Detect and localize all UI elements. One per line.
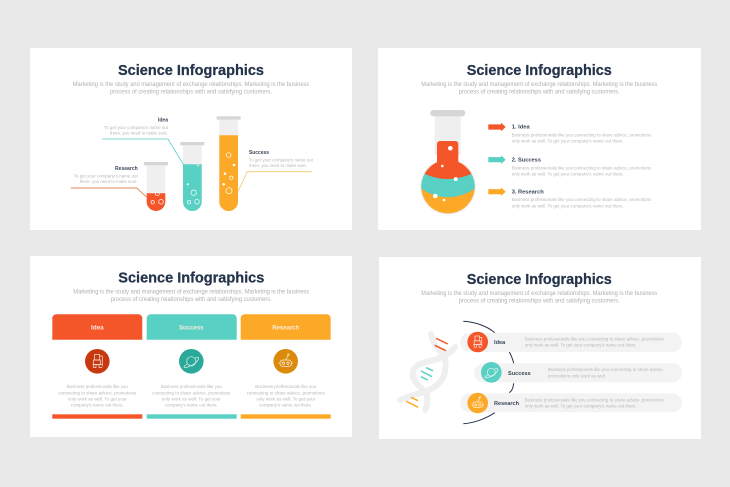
label: idea <box>104 117 169 135</box>
row: idea: Idea <box>494 340 506 346</box>
item: research: 3. Research <box>512 189 544 195</box>
subtitle: process of creating relationships with and satisfying customers. <box>110 88 272 96</box>
icon: planet <box>179 349 204 374</box>
title: Science Infographics <box>118 271 264 287</box>
card: idea: connecting to share advice, promotions <box>58 390 137 395</box>
item: success: Business professionals like you connecting to share advice, promotions <box>512 165 652 170</box>
card: research: only work as well. To get your <box>256 396 316 401</box>
item: success: only work as well. To get your company's name out there. <box>512 172 624 177</box>
panel: three cards <box>30 256 352 437</box>
card: research: company's name out there. <box>259 403 312 408</box>
card: idea: company's name out there. <box>71 403 124 408</box>
subtitle: Marketing is the study and management of exchange relationships. Marketing is the business <box>421 290 657 297</box>
row: research: only work as well. To get your company's name out there. <box>525 404 637 409</box>
arc segments <box>463 321 514 424</box>
card: success <box>147 314 237 419</box>
card: idea: only work as well. To get your <box>68 396 127 401</box>
card: research <box>241 314 331 419</box>
title: Science Infographics <box>467 272 612 288</box>
label: research: To get your company's name out <box>74 174 138 179</box>
panel: dna <box>379 257 701 439</box>
row: success: promotions only work as well. <box>548 373 606 378</box>
idea tube <box>180 142 204 211</box>
subtitle: Marketing is the study and management of exchange relationships. Marketing is the business <box>73 81 309 88</box>
item: success: 2. Success <box>512 158 541 164</box>
card: research: connecting to share advice, promotions <box>247 390 325 395</box>
icon: robot head <box>467 393 488 413</box>
title: Science Infographics <box>118 63 264 79</box>
label: success: there, you need to make sure. <box>249 163 307 168</box>
row: success <box>474 362 682 383</box>
card: idea: Idea <box>91 325 104 332</box>
label: success: To get your company's name out <box>249 157 314 162</box>
row: idea: only work as well. To get your company's name out there. <box>525 343 637 348</box>
card: idea: Business professionals like you <box>67 384 128 389</box>
panel: flask <box>378 48 701 230</box>
leader line: success <box>237 172 312 193</box>
arrow: success <box>488 155 506 164</box>
card: success: Business professionals like you <box>161 384 222 389</box>
arrow: research <box>488 187 506 196</box>
label: idea: To get your company's name out <box>104 125 169 130</box>
panel: test tubes <box>30 48 352 230</box>
row: idea <box>460 332 682 352</box>
label: success: Success <box>249 150 269 156</box>
leader line: idea <box>102 139 183 164</box>
illustration: dna helix <box>400 334 455 410</box>
row: research: Business professionals like you connecting to share advice, promotions <box>525 398 664 403</box>
flask illustration <box>420 110 476 216</box>
item: research <box>512 189 652 208</box>
success tube <box>217 116 241 211</box>
item: idea: Business professionals like you connecting to share advice, promotions <box>512 132 652 137</box>
item: research: only work as well. To get your company's name out there. <box>512 203 624 208</box>
icon: robot <box>85 349 110 374</box>
row: research <box>460 393 682 413</box>
subtitle <box>73 81 309 96</box>
label: success <box>249 150 314 168</box>
label: research: Research <box>115 166 138 172</box>
row: idea: Business professionals like you connecting to share advice, promotions <box>525 337 664 342</box>
subtitle: process of creating relationships with and satisfying customers. <box>459 88 620 96</box>
row: success: Business professionals like you connecting to share advice, <box>548 367 664 372</box>
subtitle: Marketing is the study and management of exchange relationships. Marketing is the business <box>73 289 309 296</box>
card: success: only work as well. To get your <box>162 396 221 401</box>
icon: planet <box>481 362 502 383</box>
label: research <box>74 166 138 184</box>
card: success: company's name out there. <box>165 403 218 408</box>
subtitle <box>421 81 657 96</box>
icon: robot head <box>273 349 298 374</box>
card: research: Business professionals like you <box>255 384 317 389</box>
card: success: connecting to share advice, promotions <box>152 390 231 395</box>
subtitle: Marketing is the study and management of exchange relationships. Marketing is the business <box>421 81 657 88</box>
label: idea: Idea <box>158 117 169 123</box>
subtitle <box>421 290 657 305</box>
label: research: there, you need to make sure. <box>80 179 138 184</box>
icon: robot <box>467 332 488 352</box>
arrow: idea <box>488 123 506 131</box>
card: idea <box>52 314 142 419</box>
card: research: Research <box>272 325 299 332</box>
subtitle <box>73 289 309 303</box>
card: success: Success <box>179 325 204 332</box>
research tube <box>144 162 168 211</box>
leader line: research <box>71 188 147 197</box>
item: idea <box>512 125 652 144</box>
title: Science Infographics <box>467 63 612 79</box>
item: idea: only work as well. To get your company's name out there. <box>512 139 624 144</box>
subtitle: process of creating relationships with and satisfying customers. <box>459 298 620 305</box>
row: research: Research <box>494 401 519 407</box>
subtitle: process of creating relationships with and satisfying customers. <box>111 296 272 303</box>
item: idea: 1. Idea <box>512 125 530 131</box>
row: success: Success <box>508 371 531 377</box>
item: success <box>512 158 652 177</box>
item: research: Business professionals like you connecting to share advice, promotions <box>512 197 652 202</box>
label: idea: there, you need to make sure. <box>110 130 168 135</box>
